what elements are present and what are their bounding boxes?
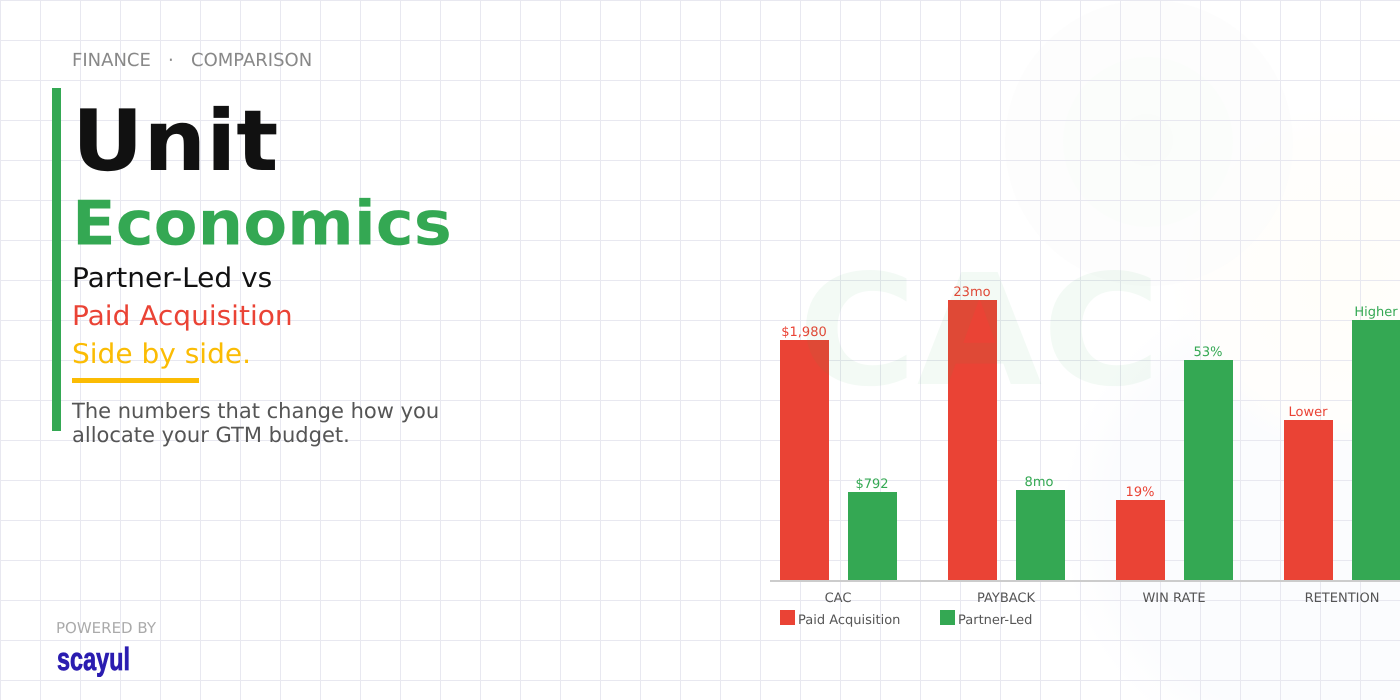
group: Payback: PAYBACK bbox=[977, 591, 1035, 606]
group: CAC bbox=[780, 325, 897, 606]
subtitle: Side by side: Side by side. bbox=[72, 338, 251, 370]
group: Win rate: 53% bbox=[1194, 345, 1222, 360]
eyebrow: category label: COMPARISON bbox=[191, 50, 312, 71]
axis line bbox=[770, 580, 1400, 582]
legend bbox=[780, 610, 1032, 628]
group: Payback: 23mo bbox=[953, 285, 991, 300]
group: CAC: $1,980 bbox=[781, 325, 827, 340]
legend: partner-led bbox=[940, 610, 1032, 628]
subtitle: Paid Acquisition: Paid Acquisition bbox=[72, 300, 293, 332]
subtitle: Partner-Led vs: Partner-Led vs bbox=[72, 262, 272, 294]
group: Retention: RETENTION bbox=[1305, 591, 1379, 606]
group: Win rate: 19% bbox=[1126, 485, 1154, 500]
group: Retention: Higher bbox=[1354, 305, 1398, 320]
group: Retention bbox=[1284, 305, 1400, 606]
logo: scayul: scayul bbox=[57, 641, 130, 677]
group: Payback: 8mo bbox=[1025, 475, 1053, 490]
title: Economics: Economics bbox=[72, 189, 452, 260]
description text: The numbers that change how you bbox=[71, 399, 439, 423]
bar chart bbox=[770, 285, 1400, 606]
legend: partner-led: Partner-Led bbox=[958, 613, 1032, 628]
group: Payback bbox=[948, 285, 1065, 606]
description text line 2: allocate your GTM budget. bbox=[72, 423, 350, 447]
powered by label: POWERED BY bbox=[56, 619, 157, 637]
group: Win rate: WIN RATE bbox=[1142, 591, 1206, 606]
green accent bar bbox=[52, 88, 61, 431]
group: CAC: $792 bbox=[855, 477, 889, 492]
watermark: CAC: CAC bbox=[798, 241, 1161, 420]
legend: paid acquisition: Paid Acquisition bbox=[798, 613, 900, 628]
eyebrow: category label: · bbox=[168, 50, 174, 71]
group: Retention: Lower bbox=[1289, 405, 1328, 420]
eyebrow: category label bbox=[72, 50, 312, 71]
eyebrow: category label: FINANCE bbox=[72, 50, 151, 71]
yellow underline bbox=[72, 378, 199, 383]
group: Win rate bbox=[1116, 345, 1233, 606]
group: CAC: CAC bbox=[825, 591, 851, 606]
title: Unit: Unit bbox=[72, 91, 278, 190]
